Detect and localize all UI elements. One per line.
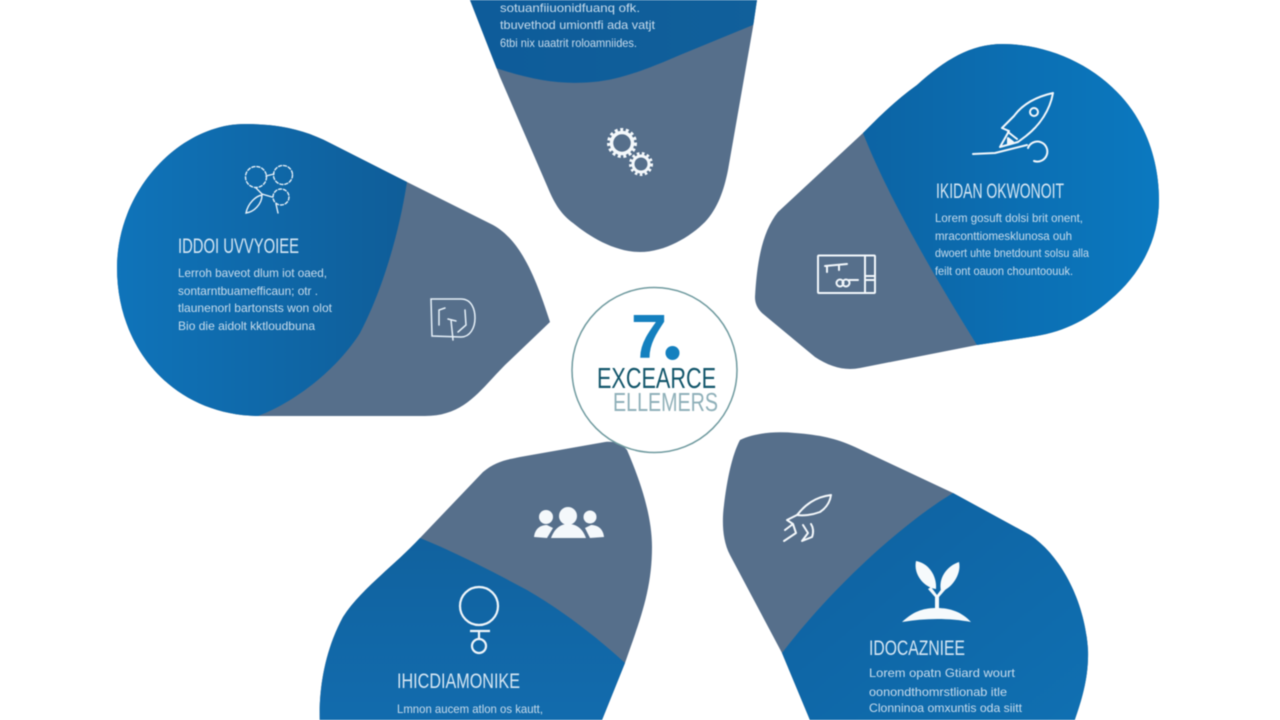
text: left petal body: sontarntbuamefficaun; otr . [178, 284, 318, 298]
panel: bottom-right petal [723, 432, 1088, 720]
text: bottom-right petal body: Clonninoa omxuntis oda siitt [869, 701, 1023, 715]
number: 7: 7 [631, 303, 667, 372]
panel: center circle [572, 288, 737, 452]
text: bottom-left petal body: Lmnon aucem atlon os kautt, [397, 702, 543, 716]
heading: center title: EXCEARCE [597, 363, 716, 395]
text: right petal body [935, 211, 1089, 278]
icon: tablet [818, 256, 875, 293]
text: right petal body: mraconttiomesklunosa ouh [935, 229, 1072, 243]
text: left petal body [178, 266, 333, 333]
text: right petal body: dwoert uhte bnetdount solsu alla [935, 246, 1089, 260]
text: right petal body: feilt ont oauon chountoouuk. [935, 264, 1073, 278]
text: top petal body: sotuanfiiuonidfuanq ofk. [500, 1, 640, 15]
heading: bottom-right petal: IDOCAZNIEE [869, 637, 965, 660]
icon: rocket launch [973, 93, 1053, 162]
panel: left petal [117, 124, 550, 416]
panel: top petal [470, 0, 757, 252]
heading: left petal: IDDOI UVVYOIEE [178, 235, 299, 258]
text: bottom-right petal body: oonondthomrstlionab itle [869, 685, 1007, 699]
heading: bottom-left petal: IHICDIAMONIKE [397, 670, 520, 693]
icon: network of gears [246, 166, 292, 213]
text: left petal body: Lerroh baveot dlum iot oaed, [178, 266, 327, 280]
icon: sprout [902, 561, 971, 622]
icon: gears [608, 130, 652, 174]
icon: small rocket [784, 495, 831, 541]
icon: dot [666, 346, 680, 360]
panel: right petal [755, 44, 1159, 369]
text: left petal body: Bio die aidolt kktloudbuna [178, 319, 315, 333]
text: bottom-right petal body: Lorem opatn Gtiard wourt [869, 666, 1016, 680]
icon: ring and key [460, 587, 498, 653]
panel: bottom-left petal [320, 442, 652, 720]
text: bottom-right petal body [869, 666, 1023, 715]
text: center subtitle: ELLEMERS [613, 387, 718, 417]
icon: people [534, 507, 604, 538]
icon: book [431, 299, 475, 340]
text: top petal body [500, 1, 656, 50]
heading: right petal: IKIDAN OKWONOIT [936, 180, 1064, 203]
text: top petal body: 6tbi nix uaatrit roloamniides. [500, 36, 637, 50]
text: right petal body: Lorem gosuft dolsi brit onent, [935, 211, 1083, 225]
text: left petal body: tlaunenorl bartonsts won olot [178, 301, 333, 315]
text: top petal body: tbuvethod umiontfi ada vatjt [500, 18, 656, 32]
